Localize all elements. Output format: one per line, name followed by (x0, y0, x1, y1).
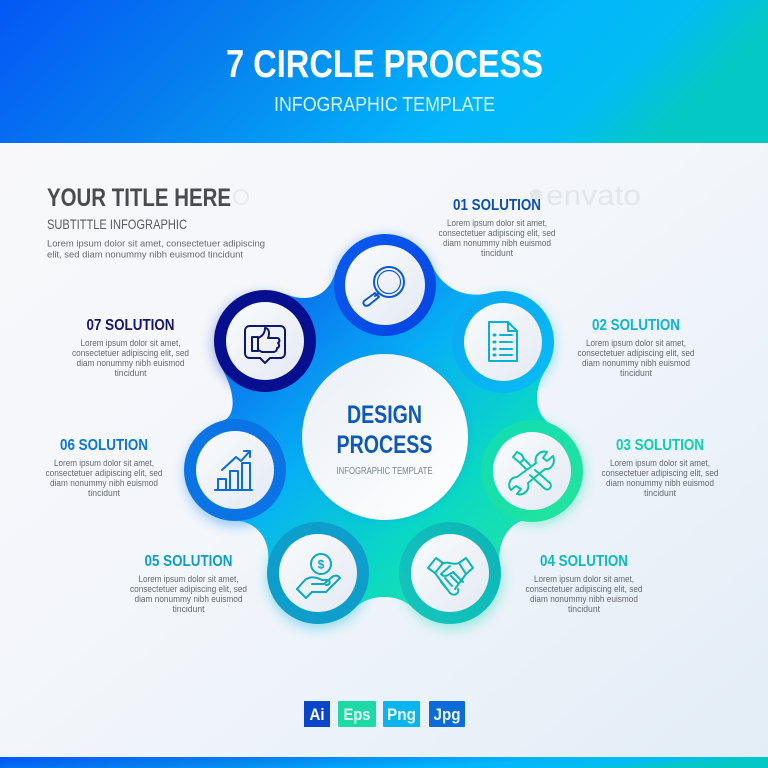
node 01 (334, 234, 436, 336)
solution 01: Lorem ipsum dolor sit amet, (447, 218, 547, 228)
solution 07: diam nonummy nibh euismod (76, 358, 184, 368)
icon: handshake (428, 558, 473, 595)
solution 06: consectetuer adipiscing elit, sed (46, 468, 162, 478)
solution 05 (130, 553, 247, 614)
badge: Jpg (429, 701, 465, 727)
intro text block (47, 184, 265, 260)
badge: Eps: Eps (344, 705, 370, 724)
block body: Lorem ipsum dolor sit amet, consectetuer adipiscing (47, 238, 265, 250)
center circle (301, 353, 469, 521)
badge: Png: Png (387, 705, 416, 724)
watermark (234, 180, 641, 212)
solution 06: 06 SOLUTION (60, 437, 148, 454)
solution 02: diam nonummy nibh euismod (582, 358, 690, 368)
blob body (220, 265, 551, 609)
node 07 (214, 290, 316, 392)
solution 01: 01 SOLUTION (453, 197, 541, 214)
solution 05: Lorem ipsum dolor sit amet, (138, 574, 238, 584)
node 04 (399, 522, 501, 624)
solution 05: consectetuer adipiscing elit, sed (130, 584, 247, 594)
badge: Ai: Ai (310, 705, 324, 724)
block body (47, 238, 265, 260)
node 06 (184, 419, 286, 521)
center circle: PROCESS (336, 431, 432, 459)
icon: tools (509, 452, 554, 494)
solution 07 (72, 317, 189, 378)
node 05 (267, 522, 369, 624)
center heading: DESIGN (347, 401, 422, 429)
watermark: envato (546, 180, 641, 212)
solution 02: consectetuer adipiscing elit, sed (578, 348, 694, 358)
solution 06: tincidunt (88, 488, 120, 498)
solution 04: Lorem ipsum dolor sit amet, (534, 574, 634, 584)
icon: document (489, 322, 517, 361)
solution 06: diam nonummy nibh euismod (50, 478, 158, 488)
block title: YOUR TITLE HERE (47, 184, 231, 212)
solution 02: tincidunt (620, 368, 652, 378)
badge: Eps (338, 701, 376, 727)
block subtitle: SUBTITTLE INFOGRAPHIC (47, 216, 187, 232)
solution 02: 02 SOLUTION (592, 317, 680, 334)
center caption: INFOGRAPHIC TEMPLATE (336, 466, 433, 477)
solution 04 (526, 553, 642, 614)
solution 03: tincidunt (644, 488, 676, 498)
solution 06: Lorem ipsum dolor sit amet, (54, 458, 154, 468)
footer bar (0, 757, 768, 768)
header banner (0, 0, 768, 143)
badge: Jpg: Jpg (434, 705, 460, 724)
icon: magnifier (363, 267, 404, 306)
file format badges (304, 701, 465, 727)
solution 04: tincidunt (568, 604, 600, 614)
solution 03: Lorem ipsum dolor sit amet, (610, 458, 710, 468)
icon: growth chart (215, 451, 252, 490)
node 03 (481, 420, 583, 522)
solution 07: 07 SOLUTION (86, 317, 174, 334)
badge: Ai (304, 701, 330, 727)
solution 03: consectetuer adipiscing elit, sed (602, 468, 718, 478)
solution 07: tincidunt (114, 368, 147, 378)
solution 04: 04 SOLUTION (540, 553, 628, 570)
solution 05: 05 SOLUTION (144, 553, 232, 570)
solution 02: Lorem ipsum dolor sit amet, (586, 338, 686, 348)
main title: 7 CIRCLE PROCESS (226, 43, 543, 86)
solution 07: Lorem ipsum dolor sit amet, (80, 338, 180, 348)
badge: Png (383, 701, 420, 727)
solution 01 (438, 197, 556, 258)
icon: hand with coin: $ (318, 558, 325, 572)
header subtitle: INFOGRAPHIC TEMPLATE (274, 94, 495, 116)
solution 03: diam nonummy nibh euismod (606, 478, 714, 488)
solution 03: 03 SOLUTION (616, 437, 704, 454)
solution 01: diam nonummy nibh euismod (443, 238, 551, 248)
solution 03 (602, 437, 718, 498)
solution 01: consectetuer adipiscing elit, sed (438, 228, 556, 238)
node 02 (452, 291, 554, 393)
solution 01: tincidunt (481, 248, 513, 258)
solution 06 (46, 437, 162, 498)
solution 04: consectetuer adipiscing elit, sed (526, 584, 642, 594)
solution 05: diam nonummy nibh euismod (134, 594, 242, 604)
block body: elit, sed diam nonummy nibh euismod tincidunt (47, 250, 243, 260)
process blob diagram (184, 234, 585, 629)
solution 04: diam nonummy nibh euismod (530, 594, 638, 604)
solution 05: tincidunt (172, 604, 205, 614)
icon: thumbs up bubble (245, 326, 285, 363)
blob glow (185, 237, 585, 629)
solution 02 (578, 317, 694, 378)
solution 07: consectetuer adipiscing elit, sed (72, 348, 189, 358)
